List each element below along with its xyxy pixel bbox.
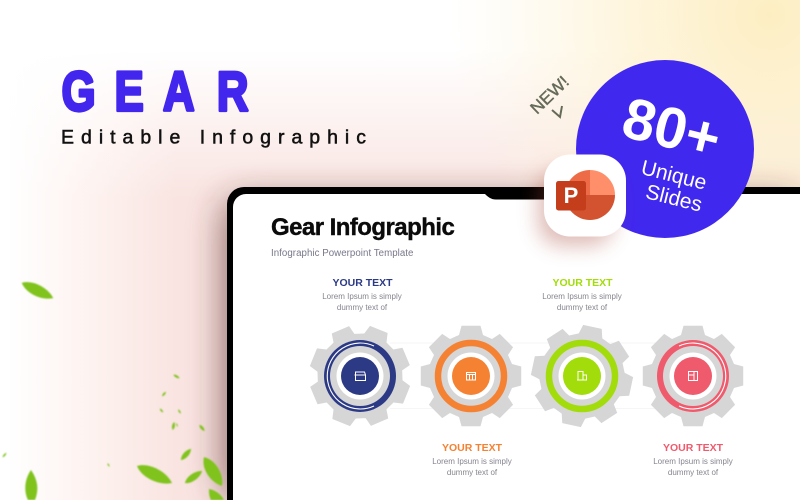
step 2 text: Lorem Ipsum is simply [432, 457, 512, 466]
icon: PowerPoint [538, 154, 626, 246]
title: GEAR: GEAR [62, 60, 248, 123]
slide heading: Gear Infographic [271, 214, 454, 241]
laptop screen area [233, 194, 800, 500]
step 4 text: dummy text of [668, 468, 719, 477]
step 3 text [542, 277, 622, 312]
badge label: slides: Slides [643, 180, 704, 217]
icon: store [354, 372, 366, 380]
step 4 text [653, 442, 733, 477]
step 4 text: Lorem Ipsum is simply [653, 457, 733, 466]
step 3: gear [522, 316, 642, 436]
step 2 text: dummy text of [447, 468, 498, 477]
icon: building [577, 372, 587, 380]
step 3 text: Lorem Ipsum is simply [542, 292, 622, 301]
label: NEW!: NEW! [527, 72, 573, 118]
panel: laptop screen [227, 187, 800, 500]
step 2: gear [421, 326, 521, 426]
step 1 text [322, 277, 402, 312]
badge: 80+ unique slides [576, 60, 754, 238]
step 1 text: YOUR TEXT [332, 277, 393, 289]
badge label: unique: Unique [639, 156, 709, 195]
step 4: gear [643, 326, 743, 426]
step 1 text: Lorem Ipsum is simply [322, 292, 402, 301]
step 3 text: YOUR TEXT [552, 277, 613, 289]
icon: office [688, 372, 698, 380]
arrow: new pointer [552, 106, 562, 117]
badge number: 80+ [616, 85, 727, 172]
step 4 text: YOUR TEXT [663, 442, 724, 454]
step 3 text: dummy text of [557, 303, 608, 312]
subtitle: Editable Infographic: Editable Infographic [61, 126, 366, 148]
step 1 text: dummy text of [337, 303, 388, 312]
slide subheading: Infographic Powerpoint Template [271, 248, 413, 259]
step 2 text [432, 442, 512, 477]
icon: shop [466, 372, 476, 380]
laptop frame [227, 187, 800, 500]
step 2 text: YOUR TEXT [442, 442, 503, 454]
step 1: gear [295, 311, 425, 441]
faint guide lines [390, 343, 700, 408]
decorative leaves [2, 278, 227, 500]
icon: PowerPoint: P [564, 183, 578, 208]
